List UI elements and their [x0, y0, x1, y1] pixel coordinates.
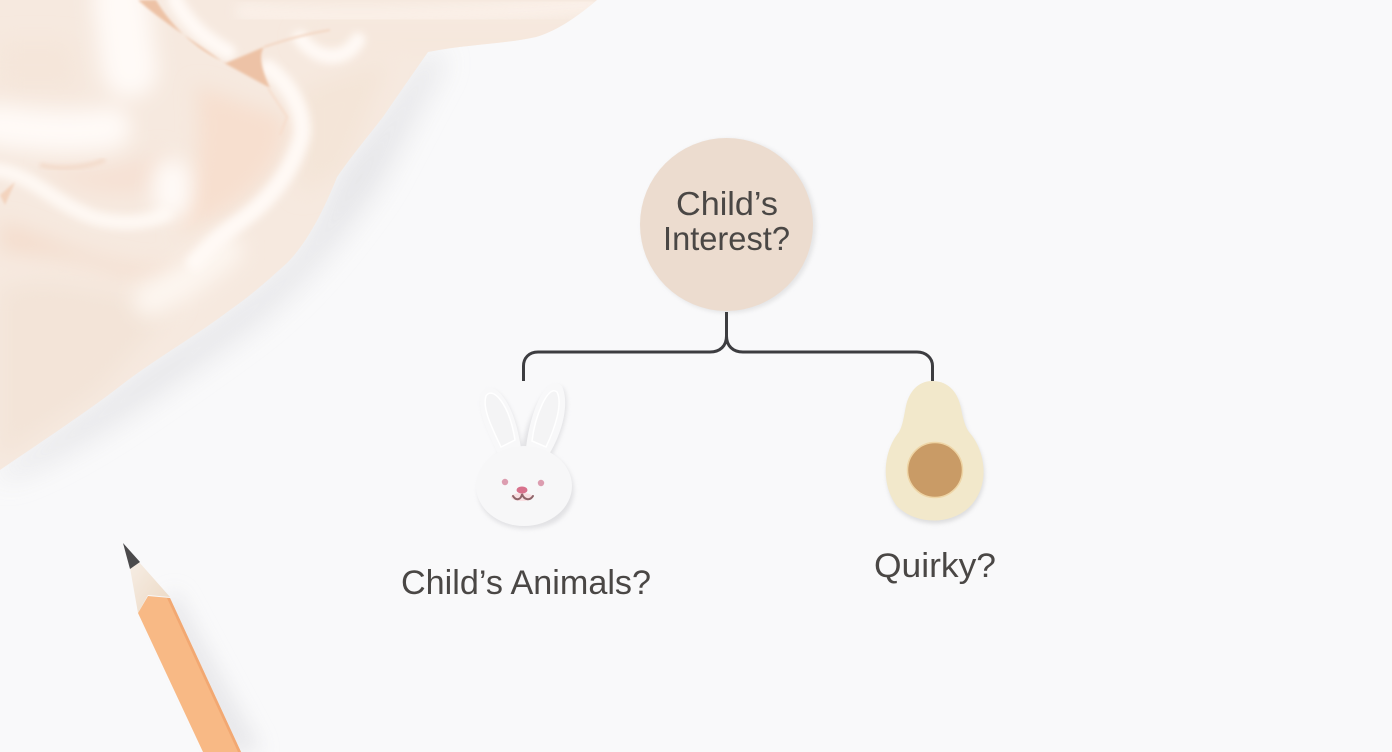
- icon: avocado: [886, 381, 985, 524]
- branching connector: [524, 312, 932, 381]
- icon: bunny: [476, 383, 574, 529]
- central circle: Child's Interest?: [640, 138, 816, 313]
- bunny eyes: [502, 479, 508, 485]
- fabric shadow: [0, 50, 445, 480]
- fabric: upper band: [245, 5, 590, 16]
- pencil: [123, 543, 262, 752]
- bunny nose: [516, 486, 528, 494]
- fabric: rope folds: [0, 0, 358, 262]
- pencil shadow: [160, 590, 262, 752]
- infographic scene: [0, 0, 995, 752]
- pencil body: [138, 596, 241, 752]
- fabric: soft highlights: [0, 0, 225, 300]
- pencil wood tip: [130, 562, 170, 613]
- label: Quirky?: Quirky?: [874, 547, 996, 585]
- bunny mouth: [513, 494, 533, 499]
- bunny head: [476, 446, 572, 526]
- bunny cheeks: [511, 493, 533, 501]
- pencil graphite: [123, 543, 140, 569]
- label: Child's Animals?: Child’s Animals?: [401, 564, 651, 602]
- fabric: dark creases: [138, 0, 270, 88]
- circle label line 2: Interest?: [663, 220, 790, 257]
- avocado pit: [908, 442, 962, 498]
- avocado shadow: [887, 385, 985, 524]
- bunny ears: [480, 388, 521, 456]
- fabric drape: [0, 0, 600, 480]
- avocado body: [886, 381, 984, 521]
- bunny shadow: [478, 386, 574, 529]
- fabric: shaded folds: [2, 92, 283, 256]
- circle label line 1: Child’s: [676, 185, 778, 222]
